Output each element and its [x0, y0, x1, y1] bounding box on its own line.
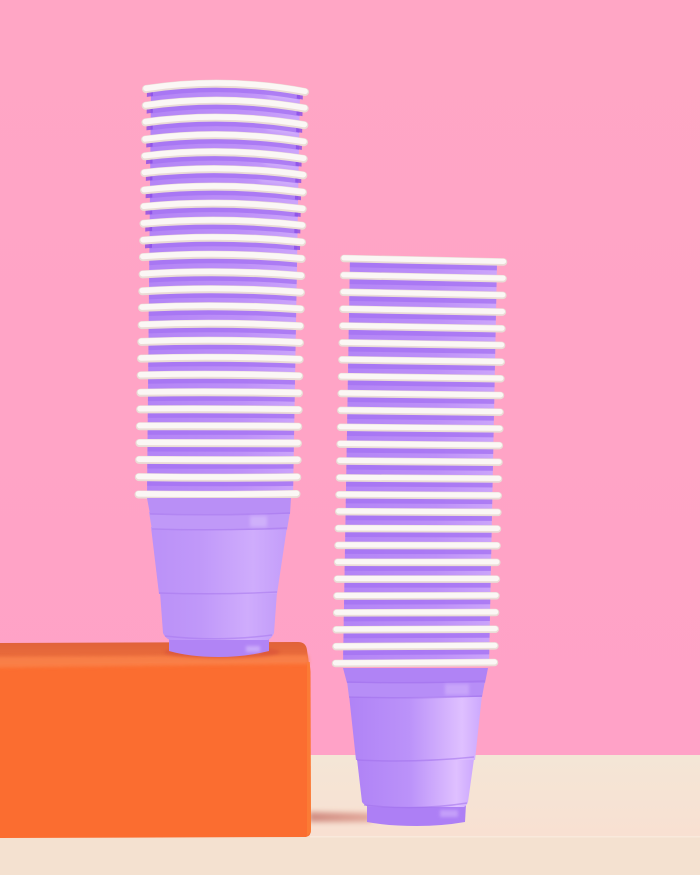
- block top edge highlight: [0, 655, 309, 668]
- cup shadow on block: [164, 646, 280, 658]
- left ring edges: [138, 84, 305, 495]
- left cup upper band: [149, 512, 290, 530]
- right cup top band: [343, 668, 488, 683]
- right stack purple bodies: [343, 258, 497, 665]
- right cup foot: [367, 804, 466, 826]
- block front face: [0, 662, 311, 838]
- right cup highlights: [440, 684, 469, 817]
- left cup highlights: [246, 516, 267, 652]
- orange block: [0, 642, 311, 838]
- left cup top band: [147, 498, 291, 514]
- left cup main wall: [151, 527, 287, 594]
- left stack highlights: [256, 91, 298, 185]
- right ring faces: [336, 258, 504, 663]
- right cup lower wall: [357, 759, 474, 807]
- left cup foot: [169, 636, 269, 657]
- left ring inner corners: [145, 92, 303, 250]
- right ring shadows: [343, 262, 497, 655]
- right ring edges: [336, 258, 504, 664]
- right bottom cup: [343, 668, 488, 826]
- right stack of cups: [336, 258, 504, 670]
- left bottom cup: [147, 498, 291, 657]
- left ring shadows: [147, 88, 300, 486]
- left cup ridges: [150, 513, 290, 639]
- right cup main wall: [349, 695, 482, 760]
- block top face: [0, 642, 309, 668]
- left stack purple bodies: [147, 86, 300, 497]
- left stack of cups: [138, 83, 305, 501]
- shadow: block and cup on floor: [309, 812, 372, 822]
- right cup ridges: [347, 681, 485, 808]
- block right edge highlight: [307, 662, 311, 836]
- left cup lower wall: [160, 592, 277, 640]
- floor: cream surface: [0, 755, 700, 875]
- right cup upper band: [347, 681, 485, 697]
- left ring faces: [138, 83, 305, 494]
